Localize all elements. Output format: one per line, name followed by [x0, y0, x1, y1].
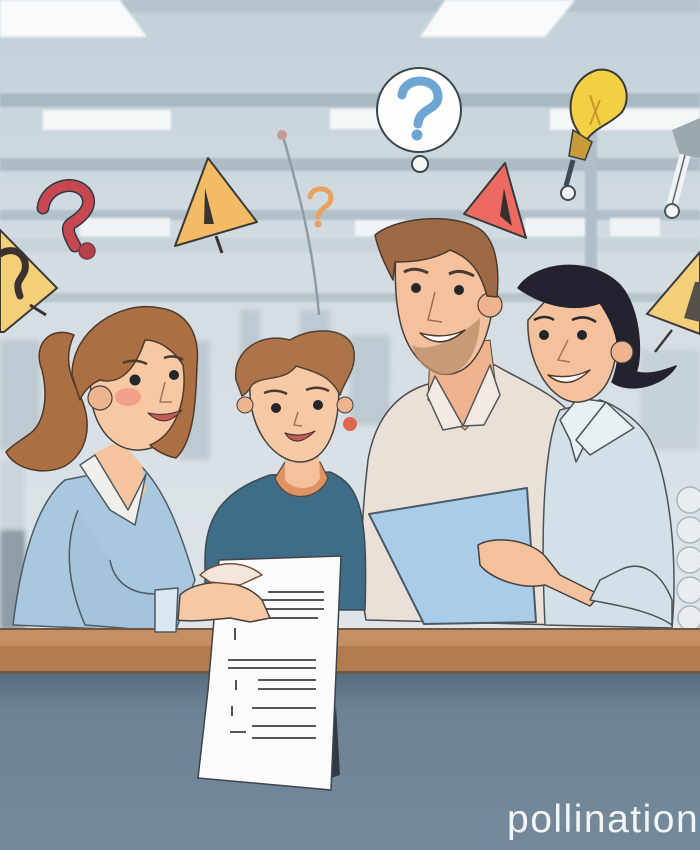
background: shop interior [0, 0, 700, 640]
icon: yellow warning sign right [647, 252, 700, 352]
icon: grey lamp right edge [665, 118, 700, 218]
person: woman with dark hair [518, 265, 676, 628]
icon: light bulb [561, 70, 627, 200]
lower panel [0, 674, 700, 850]
document on the counter [198, 556, 341, 790]
hand on document [155, 564, 270, 632]
person: woman with ponytail [6, 307, 197, 632]
icon: red warning triangle [464, 163, 526, 238]
tablet with hands [369, 488, 672, 625]
icon: orange warning triangle [175, 158, 257, 253]
icon: small orange question mark [310, 189, 331, 228]
watermark text: pollination [507, 798, 699, 841]
icon: yellow warning sign left [0, 230, 57, 332]
counter: wooden desk [0, 628, 700, 674]
hanging lamp stem [277, 130, 319, 315]
icon: red question mark [43, 185, 95, 259]
person: man with beard [362, 219, 576, 625]
person: boy in teal sweater [205, 331, 366, 610]
icon: question speech bubble [377, 68, 461, 172]
